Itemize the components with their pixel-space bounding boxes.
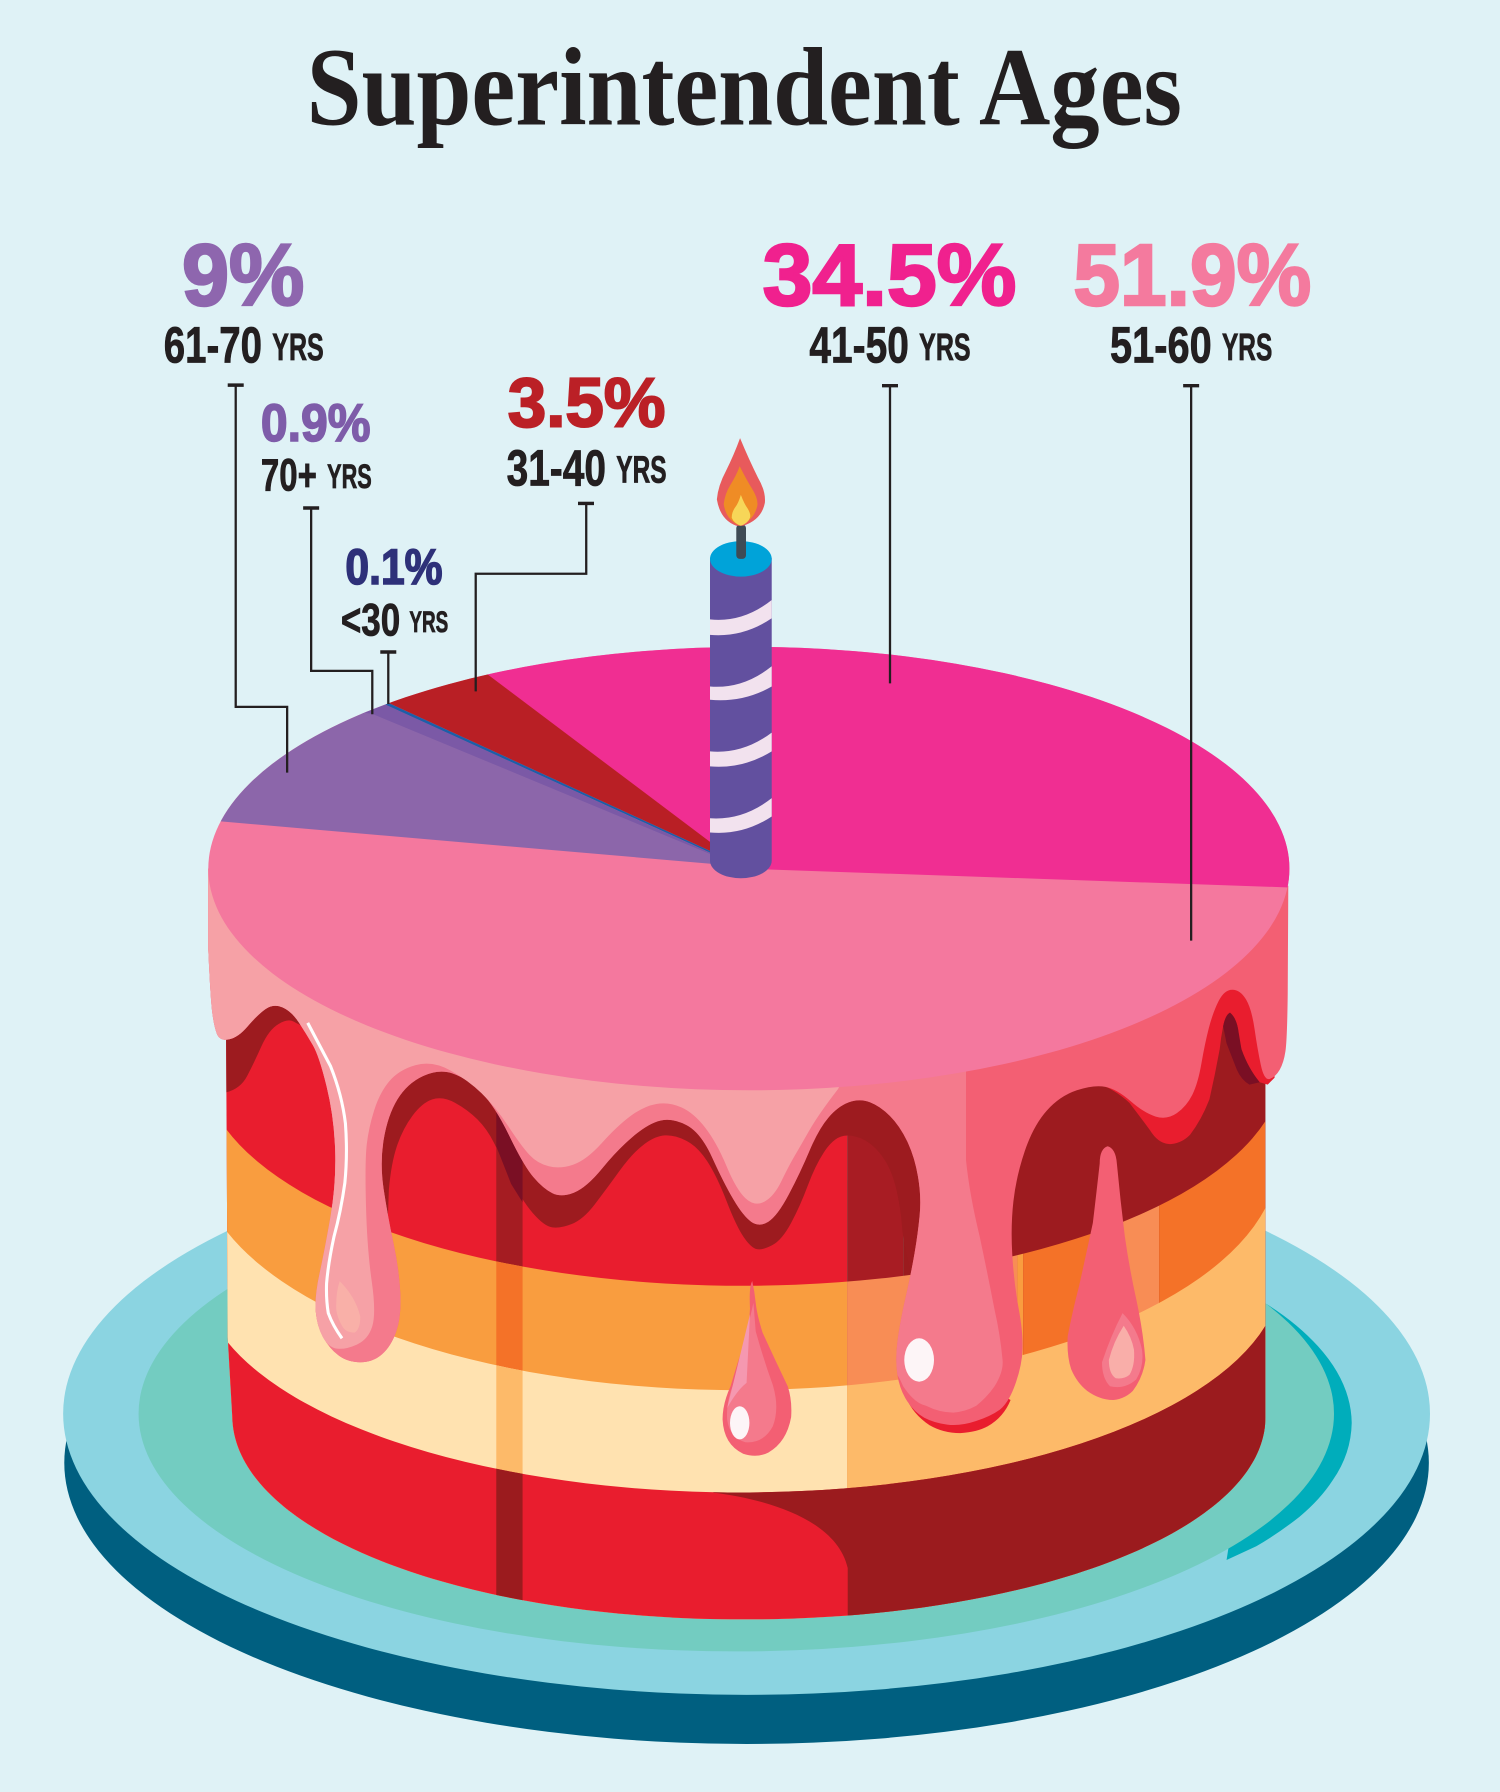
- cake body layers: [226, 1006, 1266, 1620]
- label: 51.9% 51-60 yrs: 51-60: [1110, 315, 1212, 373]
- candle flame: [717, 438, 765, 526]
- pie chart on cake top: [208, 647, 1290, 1090]
- frosting: dark pink full shape: [208, 869, 1288, 1425]
- big drip red shadow: [903, 1371, 1011, 1433]
- label: 3.5% 31-40 yrs: 3.5%: [508, 363, 665, 441]
- label: 0.9% 70+ yrs: 0.9%: [261, 394, 371, 453]
- candle top: [710, 541, 772, 577]
- plate: light top: [63, 1133, 1430, 1695]
- slice: 34.5% 41-50 yrs: [488, 647, 1290, 888]
- leader line: 41-50 yrs: [882, 386, 898, 683]
- bottom red cake layer: [228, 1326, 1266, 1620]
- label: 3.5% 31-40 yrs: [507, 363, 667, 497]
- label: 51.9% 51-60 yrs: [1073, 227, 1311, 373]
- label: 0.9% 70+ yrs: 70+: [261, 449, 317, 500]
- frosting: mid pink shape: [208, 869, 1003, 1413]
- slice: 0.9% 70+ yrs: [362, 704, 710, 854]
- plate: teal crescent: [1227, 1304, 1352, 1560]
- label: 0.1% under 30 yrs: 0.1%: [345, 538, 443, 595]
- leader line: 51-60 yrs: [1183, 386, 1199, 941]
- frosting: pale pink shape: [208, 869, 852, 1349]
- label: 9% 61-70 yrs: 61-70: [164, 315, 262, 373]
- left drip highlight: [336, 1281, 360, 1333]
- candle body: [710, 558, 772, 878]
- slice: 0.1% under 30 yrs: [386, 703, 710, 852]
- plate: green inner ring: [139, 1176, 1334, 1651]
- leader line: 70+ yrs: [303, 508, 372, 714]
- label: 3.5% 31-40 yrs: 31-40: [507, 439, 606, 497]
- label: 34.5% 41-50 yrs: 41-50: [809, 315, 909, 373]
- label: 0.9% 70+ yrs: YRS: [327, 458, 372, 496]
- label: 0.1% under 30 yrs: [341, 538, 448, 645]
- label: 9% 61-70 yrs: YRS: [272, 326, 324, 368]
- label: 34.5% 41-50 yrs: 34.5%: [763, 227, 1016, 324]
- frosting shadow on cake: [226, 1006, 1266, 1326]
- frosting: maroon sliver: [1223, 1013, 1260, 1085]
- label: 34.5% 41-50 yrs: [763, 227, 1016, 373]
- label: 0.9% 70+ yrs: [261, 394, 372, 500]
- left drip white line: [308, 1023, 346, 1338]
- right drop: [1067, 1146, 1145, 1400]
- frosting: bright red edge right: [1080, 971, 1275, 1144]
- plate: [63, 1133, 1430, 1744]
- candle: [710, 438, 772, 878]
- slices clipped to top surface: [220, 647, 1290, 888]
- leader line: 61-70 yrs: [228, 385, 287, 773]
- label: 51.9% 51-60 yrs: 51.9%: [1073, 227, 1311, 324]
- label: 0.1% under 30 yrs: YRS: [409, 606, 448, 639]
- slice: 9% 61-70 yrs: [220, 712, 710, 864]
- leader line: under 30 yrs: [380, 652, 396, 704]
- label: 51.9% 51-60 yrs: YRS: [1222, 326, 1272, 368]
- cream cake layer: [227, 1208, 1266, 1620]
- label: 9% 61-70 yrs: 9%: [182, 227, 304, 324]
- slice: 51.9% 51-60 yrs: [208, 647, 1289, 1090]
- label: 0.1% under 30 yrs: <30: [341, 594, 400, 645]
- title: Superintendent Ages: [307, 26, 1182, 149]
- label: 34.5% 41-50 yrs: YRS: [919, 326, 971, 368]
- leader line: 31-40 yrs: [476, 503, 594, 691]
- big drip white spot: [904, 1338, 934, 1382]
- candle stripes: [710, 600, 772, 833]
- plate: dark underside: [64, 1182, 1429, 1744]
- label: 3.5% 31-40 yrs: YRS: [616, 448, 667, 490]
- candle wick: [736, 525, 746, 559]
- orange cake layer: [226, 1122, 1266, 1620]
- slice: 3.5% 31-40 yrs: [390, 674, 710, 851]
- frosting and drips: [208, 869, 1288, 1456]
- center drop: [723, 1281, 791, 1456]
- label: 9% 61-70 yrs: [164, 227, 324, 373]
